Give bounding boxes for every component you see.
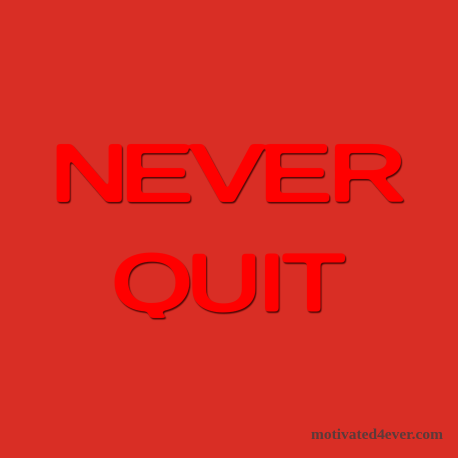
title: NEVER: NEVER	[50, 129, 407, 218]
title: QUIT: QUIT	[112, 238, 345, 327]
poster	[56, 144, 443, 439]
watermark: website: motivated4ever.com	[311, 427, 443, 443]
